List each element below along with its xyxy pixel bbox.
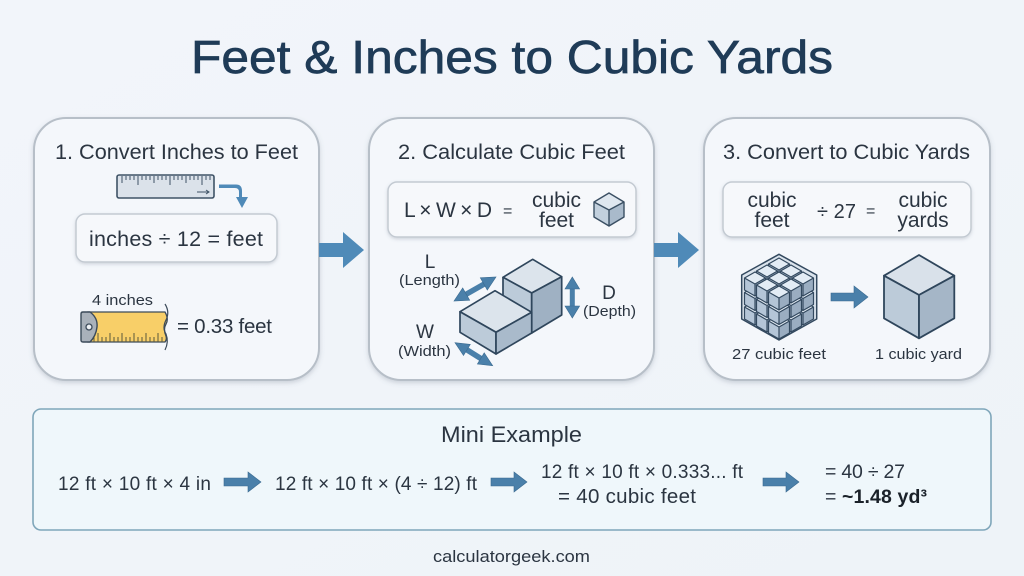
step: cubic feet result: = 40 cubic feet <box>558 485 696 508</box>
formula box: L W D: = <box>503 203 512 220</box>
diagram: stepped block <box>460 259 562 354</box>
step: convert inches: 12 ft × 10 ft × (4 ÷ 12) ft <box>275 474 478 495</box>
arrow: ruler to formula <box>219 184 248 208</box>
arrow: depth <box>565 277 580 318</box>
icon: big cube <box>884 255 954 338</box>
icon: small cube <box>594 193 624 226</box>
formula box: divide by 27: = <box>866 203 875 220</box>
step: final answer: = 40 ÷ 27 <box>825 461 905 483</box>
formula box: L W D: cubic <box>532 189 581 212</box>
icon: tape measure <box>81 304 168 350</box>
label: width: (Width) <box>398 344 451 360</box>
heading: step 3: 3. Convert to Cubic Yards <box>723 141 970 164</box>
formula box: divide by 27: ÷ 27 <box>817 201 856 223</box>
arrow: step 1 to step 2 <box>319 232 364 268</box>
heading: mini example: Mini Example <box>441 422 582 447</box>
label: depth: D <box>602 283 616 304</box>
label: width: W <box>416 322 434 343</box>
arrow: example 1 <box>224 472 261 492</box>
label: 4 inches: 4 inches <box>92 293 153 309</box>
label: depth <box>583 283 636 320</box>
footer: site name: calculatorgeek.com <box>433 547 590 566</box>
label: width <box>398 322 451 360</box>
heading: step 1: 1. Convert Inches to Feet <box>55 141 298 164</box>
arrow: width <box>455 343 493 366</box>
formula box: divide by 27 <box>723 182 971 237</box>
label: length: L <box>425 252 435 273</box>
formula box: divide by 27: cubic <box>898 189 948 212</box>
arrow: example 2 <box>491 472 527 492</box>
step: starting dimensions: 12 ft × 10 ft × 4 in <box>58 474 211 495</box>
step: cubic feet result: 12 ft × 10 ft × 0.333... ft <box>541 462 744 483</box>
icon: 27 small cubes <box>742 254 817 340</box>
panel: step 3 convert to cubic yards <box>704 118 990 380</box>
step: cubic feet result <box>541 462 744 508</box>
panel: step 2 calculate cubic feet <box>369 118 654 380</box>
label: length <box>399 252 460 289</box>
panel: step 1 convert inches to feet <box>34 118 319 380</box>
arrow: small cubes to big cube <box>831 286 868 308</box>
result: 0.33 feet: = 0.33 feet <box>177 315 272 338</box>
label: length: (Length) <box>399 273 460 289</box>
label: depth: (Depth) <box>583 304 636 320</box>
formula box: divide by 27: cubic <box>747 189 797 212</box>
label: 1 cubic yard: 1 cubic yard <box>875 347 962 363</box>
formula box: inches to feet <box>76 214 277 262</box>
arrow: step 2 to step 3 <box>654 232 699 268</box>
formula box: divide by 27: yards <box>897 209 949 232</box>
formula box: L W D: L × W × D <box>404 199 492 222</box>
heading: step 2: 2. Calculate Cubic Feet <box>398 141 625 164</box>
formula box: L W D <box>388 182 636 237</box>
label: 27 cubic feet: 27 cubic feet <box>732 347 826 363</box>
formula box: divide by 27: feet <box>754 209 790 232</box>
title: Feet & Inches to Cubic Yards <box>191 31 833 83</box>
formula box: L W D: feet <box>539 209 574 232</box>
arrow: length <box>454 277 496 301</box>
step: final answer: = ~1.48 yd³ <box>825 486 928 508</box>
panel: mini example <box>33 409 991 530</box>
icon: ruler <box>117 175 214 198</box>
formula box: inches to feet: inches ÷ 12 = feet <box>89 227 263 251</box>
step: final answer <box>825 461 928 508</box>
arrow: example 3 <box>763 472 799 492</box>
